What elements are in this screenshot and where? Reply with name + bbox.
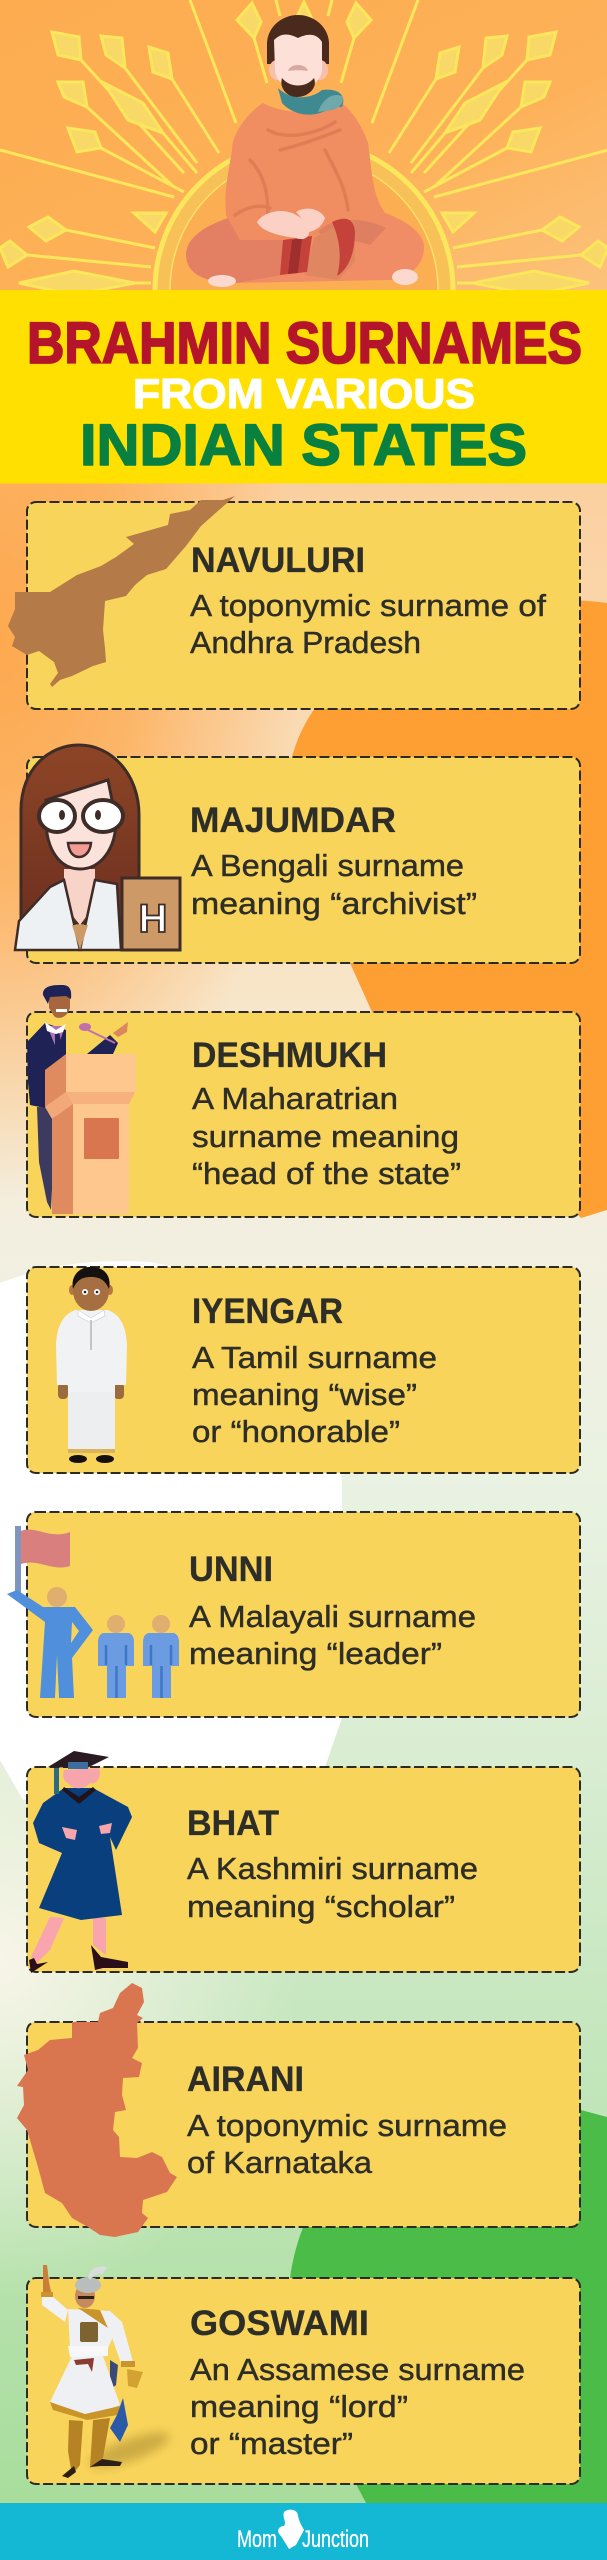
description: meaning “leader” bbox=[189, 1636, 442, 1671]
heading: AIRANI bbox=[187, 2060, 304, 2099]
heading: DESHMUKH bbox=[192, 1036, 387, 1075]
title line 2: FROM VARIOUS bbox=[133, 370, 475, 417]
description: A Kashmiri surname bbox=[187, 1851, 478, 1886]
sun rays bbox=[0, 0, 607, 439]
icon: Andhra Pradesh map bbox=[8, 496, 235, 687]
icon: man in white dhoti bbox=[56, 1267, 127, 1463]
description: meaning “wise” bbox=[192, 1377, 417, 1412]
description: surname meaning bbox=[192, 1119, 459, 1154]
title banner bbox=[0, 290, 607, 484]
description bbox=[192, 1081, 461, 1191]
panel: Navuluri bbox=[8, 496, 580, 709]
description bbox=[187, 1851, 478, 1924]
description: A toponymic surname bbox=[187, 2108, 507, 2143]
description: meaning “archivist” bbox=[191, 886, 477, 921]
description: A toponymic surname of bbox=[190, 588, 546, 623]
description: A Malayali surname bbox=[189, 1599, 476, 1634]
header illustration bbox=[0, 0, 607, 439]
panel: Airani bbox=[17, 1983, 580, 2237]
panel: Iyengar bbox=[27, 1267, 580, 1473]
footer with MomJunction logo bbox=[0, 2503, 607, 2560]
panel: Deshmukh bbox=[27, 985, 580, 1217]
icon: Karnataka map bbox=[17, 1983, 177, 2237]
monk scarf bbox=[278, 88, 343, 115]
panel: Goswami bbox=[27, 2265, 580, 2484]
heading: GOSWAMI bbox=[190, 2304, 369, 2343]
heading: IYENGAR bbox=[192, 1292, 343, 1331]
icon: leader with flag and followers bbox=[7, 1526, 179, 1698]
description: or “master” bbox=[190, 2426, 353, 2461]
monk head bbox=[267, 15, 329, 73]
icon: graduate bbox=[29, 1751, 132, 1973]
heading: MAJUMDAR bbox=[190, 801, 396, 840]
description bbox=[191, 848, 477, 921]
panel: Majumdar bbox=[15, 745, 580, 963]
heading: UNNI bbox=[189, 1550, 273, 1589]
description: of Karnataka bbox=[187, 2145, 373, 2180]
monk figure bbox=[186, 15, 424, 287]
heading: NAVULURI bbox=[191, 541, 365, 580]
description bbox=[190, 2352, 525, 2461]
logo mark bbox=[278, 2510, 304, 2549]
description: Andhra Pradesh bbox=[190, 625, 421, 660]
description: A Tamil surname bbox=[192, 1340, 437, 1375]
description bbox=[192, 1340, 437, 1449]
description bbox=[189, 1599, 476, 1671]
description: or “honorable” bbox=[192, 1414, 400, 1449]
logo text: Junction bbox=[302, 2526, 369, 2553]
icon: king in white coat bbox=[41, 2265, 173, 2478]
description: meaning “scholar” bbox=[187, 1889, 455, 1924]
panel: Unni bbox=[7, 1512, 580, 1717]
logo text bbox=[237, 2526, 369, 2553]
description bbox=[187, 2108, 507, 2180]
description: A Maharatrian bbox=[192, 1081, 398, 1116]
description: A Bengali surname bbox=[191, 848, 464, 883]
icon: woman with H board: H bbox=[139, 897, 167, 941]
description: An Assamese surname bbox=[190, 2352, 525, 2387]
icon: woman with H board bbox=[15, 745, 180, 950]
heading: BHAT bbox=[187, 1804, 279, 1843]
description: meaning “lord” bbox=[190, 2389, 408, 2424]
description bbox=[190, 588, 546, 660]
title line 3: INDIAN STATES bbox=[80, 413, 527, 478]
panel: Bhat bbox=[27, 1751, 580, 1973]
description: “head of the state” bbox=[192, 1156, 461, 1191]
icon: speaker at podium bbox=[27, 985, 136, 1214]
background with colour blobs bbox=[0, 483, 607, 2503]
logo text: Mom bbox=[237, 2526, 277, 2553]
